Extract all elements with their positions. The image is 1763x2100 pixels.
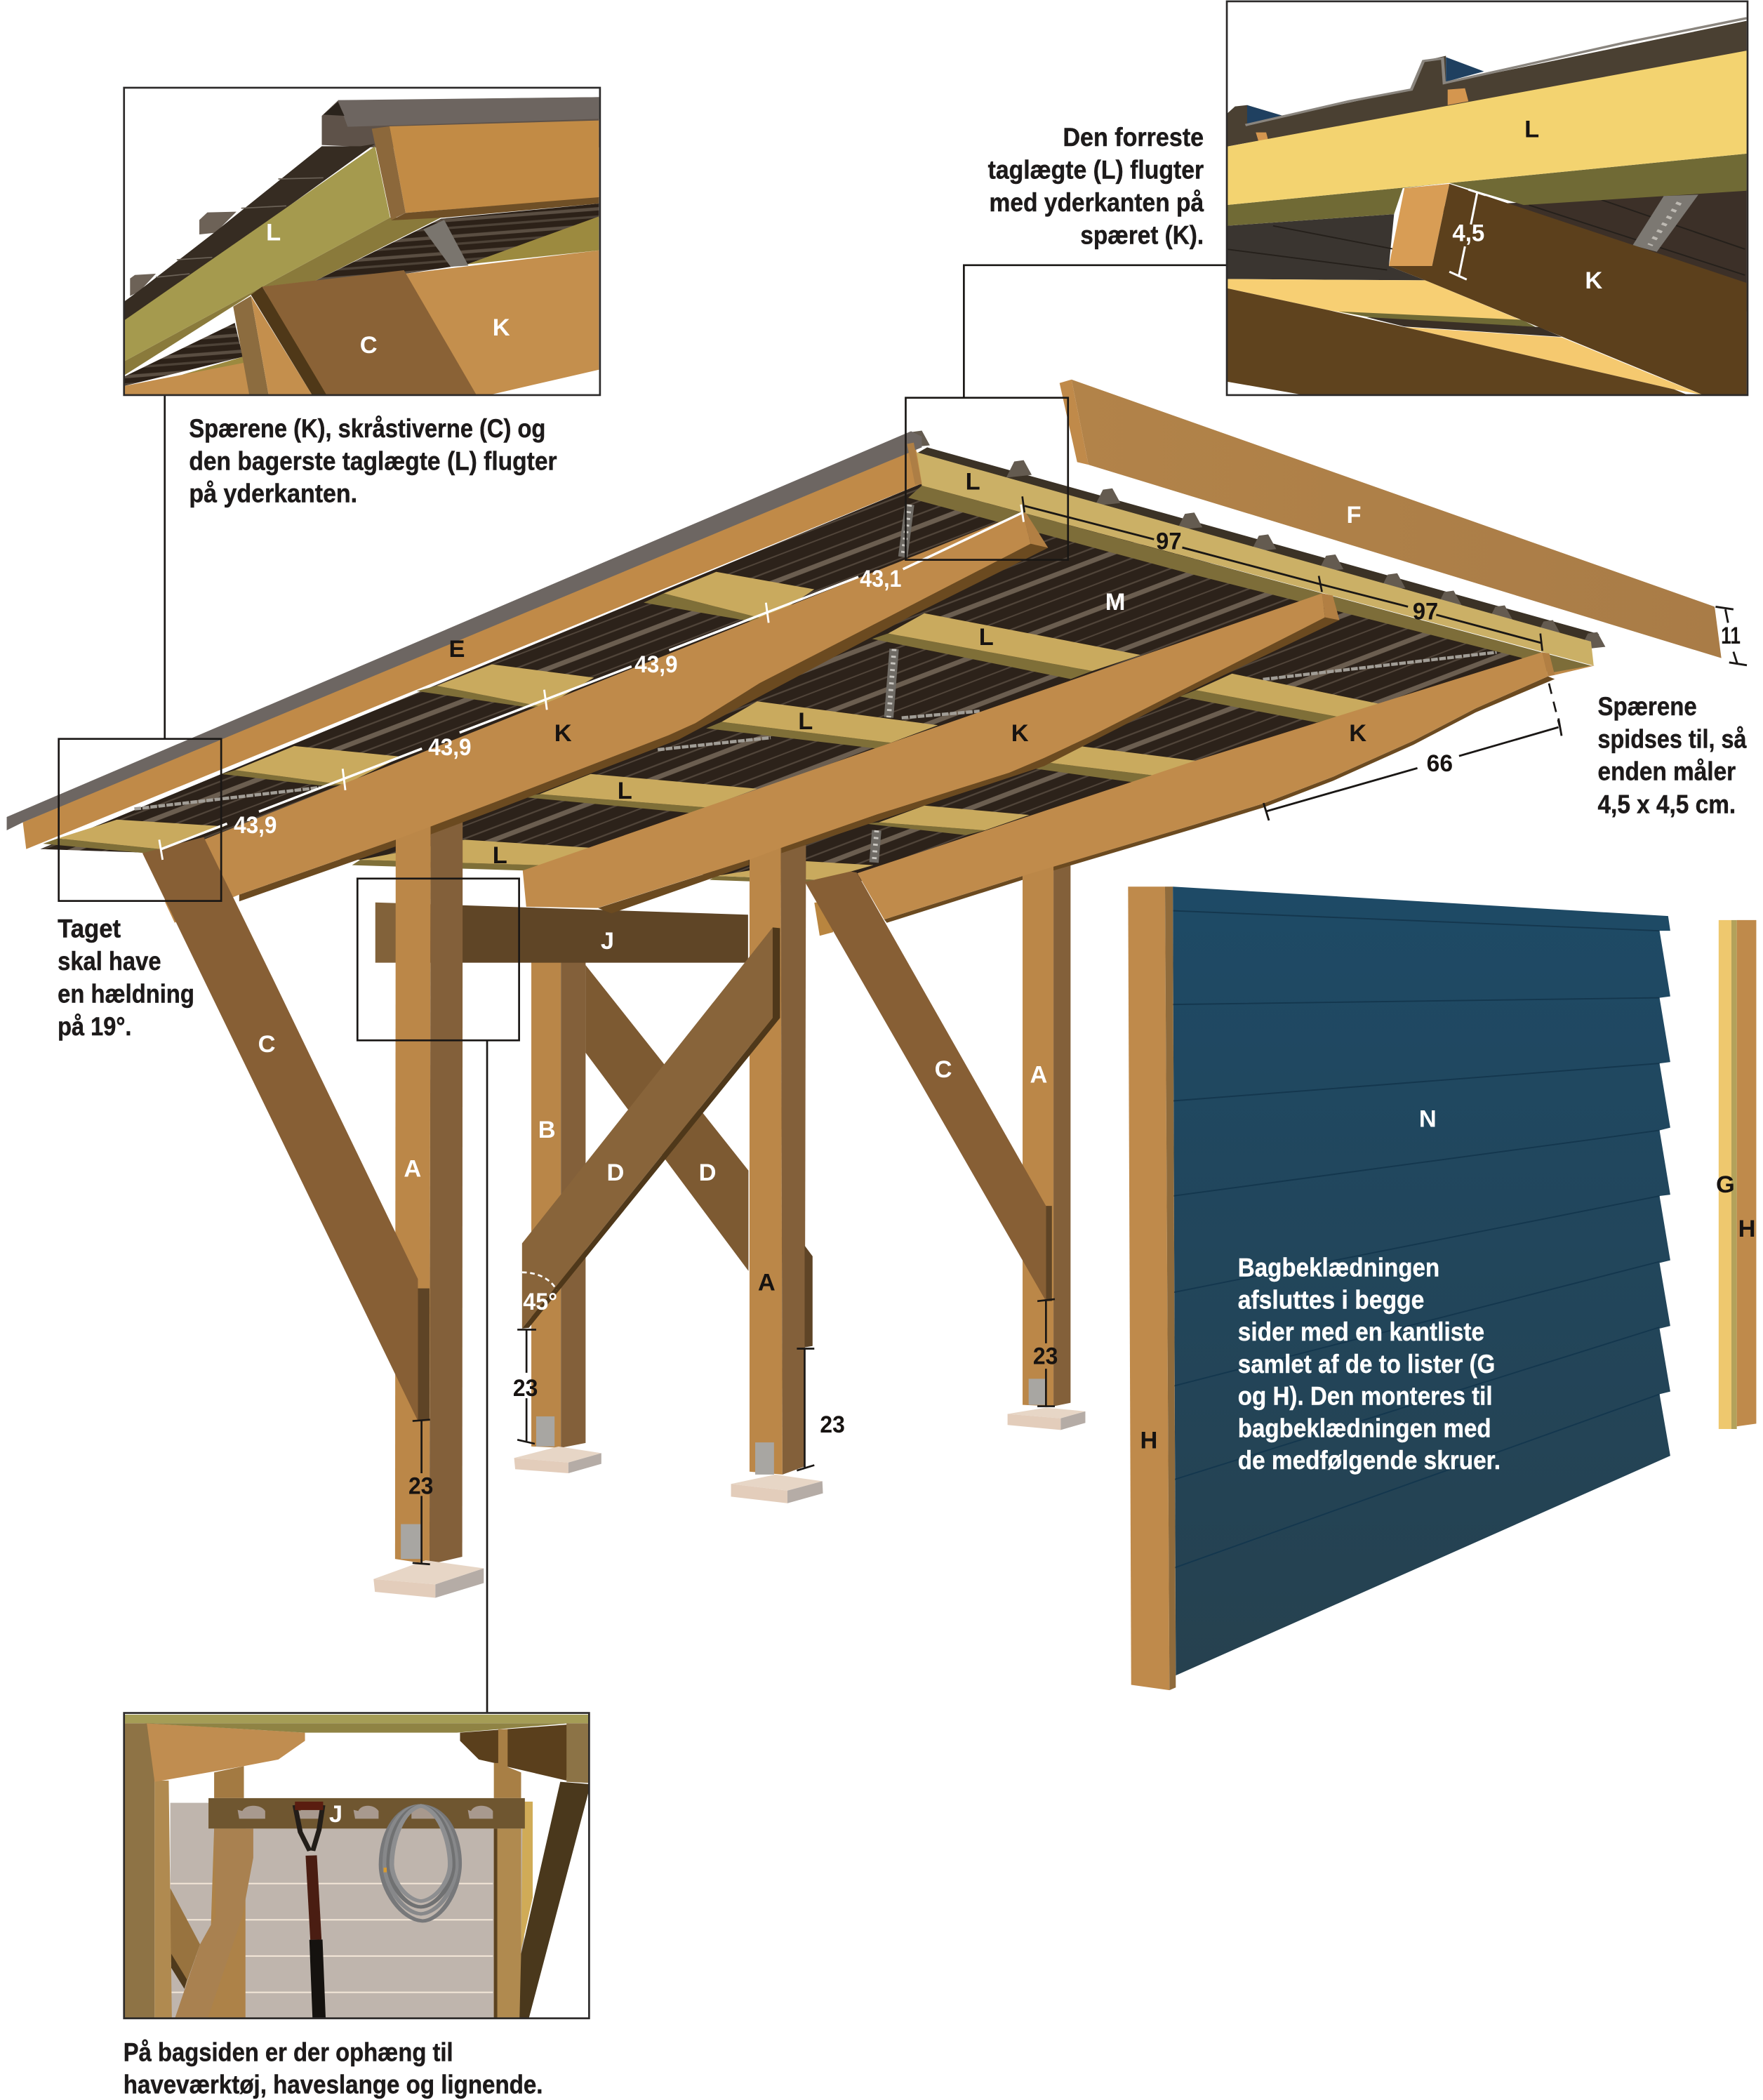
part letters on main drawing: C <box>935 1056 952 1083</box>
part letters on main drawing: N <box>1419 1106 1437 1133</box>
dimension: 97 and 97 rafter spacing <box>1023 496 1543 651</box>
dimension: 43,9 / 43,9 / 43,9 / 43,1 white spacing along rafter: 43,9 <box>234 812 277 839</box>
text: cladding note on panel: afsluttes i begge <box>1238 1284 1424 1314</box>
part letters on main drawing: K <box>554 720 572 747</box>
text: front batten caption: Den forreste <box>1063 122 1204 152</box>
text: rear rail caption: På bagsiden er der ophæng til <box>124 2038 453 2067</box>
part letters on main drawing: E <box>448 636 465 663</box>
text: rear rail caption <box>124 2038 543 2099</box>
inset: rear roof corner detail: K <box>493 314 510 341</box>
part letters on main drawing: K <box>1011 720 1029 747</box>
text: roof pitch note: på 19°. <box>58 1011 131 1041</box>
inset: rear roof corner detail <box>124 88 600 395</box>
inset: rear hanging rail J with spade and hose <box>124 1713 589 2019</box>
beam J <box>375 903 748 963</box>
text: rear corner caption: den bagerste taglægte (L) flugter <box>189 446 557 475</box>
rafter K (left) <box>160 512 1048 923</box>
text: rafter taper note: 4,5 x 4,5 cm. <box>1597 789 1736 818</box>
dimension: 45 degree angle: 45° <box>523 1289 557 1315</box>
dimension: 45 degree angle <box>522 1272 557 1315</box>
part letters on main drawing: H <box>1140 1428 1157 1454</box>
part letters on main drawing: L <box>618 778 632 804</box>
text: front batten caption: taglægte (L) flugter <box>988 155 1204 185</box>
inset: rear roof corner detail: C <box>360 332 378 359</box>
callout frames and leader lines <box>59 265 1228 1713</box>
text: rear corner caption <box>189 413 557 508</box>
text: cladding note on panel: bagbeklædningen med <box>1238 1414 1491 1442</box>
post B <box>531 962 585 1448</box>
dimensions: 23 distances at post bases: 23 <box>820 1411 845 1438</box>
fascia board E with metal roof edge <box>7 431 922 849</box>
post A (front) <box>395 804 463 1564</box>
text: front batten caption: med yderkanten på <box>990 187 1204 217</box>
dimension: 43,9 / 43,9 / 43,9 / 43,1 white spacing along rafter: 43,9 <box>428 734 471 761</box>
part letters on main drawing: K <box>1349 720 1366 747</box>
inset: front batten and rafter tip detail: L <box>1524 117 1539 143</box>
dimension: 43,9 / 43,9 / 43,9 / 43,1 white spacing along rafter: 43,9 <box>634 651 678 678</box>
part letters on main drawing: A <box>404 1155 421 1182</box>
part letters on main drawing: L <box>493 842 507 869</box>
part letters on main drawing: A <box>758 1270 776 1296</box>
text: cladding note on panel: sider med en kantliste <box>1238 1317 1484 1346</box>
part letters on main drawing: F <box>1346 502 1362 529</box>
dimension: 43,9 / 43,9 / 43,9 / 43,1 white spacing along rafter <box>159 505 1024 860</box>
text: cladding note on panel: samlet af de to lister (G <box>1238 1349 1495 1378</box>
text: rear rail caption: haveværktøj, haveslange og lignende. <box>124 2070 543 2099</box>
panel: loose fascia board F <box>1060 380 1722 658</box>
part letters on main drawing: G <box>1716 1171 1735 1198</box>
dimension: 97 and 97 rafter spacing: 97 <box>1156 528 1182 554</box>
inset: front batten and rafter tip detail: 4,5 <box>1452 220 1484 246</box>
text: rear corner caption: Spærene (K), skråstiverne (C) og <box>189 413 545 443</box>
part letters on main drawing: L <box>798 708 813 735</box>
text: cladding note on panel: og H). Den monteres til <box>1238 1381 1493 1411</box>
dimensions: 23 distances at post bases: 23 <box>513 1375 538 1402</box>
text: cladding note on panel <box>1238 1253 1501 1475</box>
post A (middle) <box>750 824 813 1475</box>
text: roof pitch note: en hældning <box>58 979 194 1009</box>
part letters on main drawing: L <box>979 624 994 651</box>
text: cladding note on panel: Bagbeklædningen <box>1238 1253 1439 1282</box>
text: front batten caption <box>988 122 1204 249</box>
dimension: 97 and 97 rafter spacing: 97 <box>1413 599 1438 625</box>
part letters on main drawing: A <box>1030 1062 1047 1089</box>
text: rear corner caption: på yderkanten. <box>189 479 357 508</box>
dimensions: 23 distances at post bases: 23 <box>1033 1343 1058 1369</box>
brace C (left) <box>142 837 430 1421</box>
dimension: 43,9 / 43,9 / 43,9 / 43,1 white spacing along rafter: 43,1 <box>860 566 902 592</box>
inset: front batten and rafter tip detail: K <box>1585 267 1602 294</box>
roof front: corrugated edge and front batten L <box>905 430 1605 675</box>
part letters on main drawing: J <box>601 928 614 955</box>
dimensions: 23 distances at post bases <box>408 1299 1058 1564</box>
text: rafter taper note <box>1597 691 1747 818</box>
inset: rear hanging rail J with spade and hose: J <box>329 1801 342 1828</box>
part letters on main drawing: C <box>258 1031 275 1058</box>
footings and metal brackets <box>373 1378 1085 1597</box>
rafter K (middle) <box>523 593 1340 913</box>
part letters on main drawing <box>258 468 1755 1454</box>
text: rafter taper note: Spærene <box>1597 691 1697 721</box>
part letters on main drawing: M <box>1105 589 1125 616</box>
part letters on main drawing: D <box>699 1159 716 1186</box>
rafter K (right) <box>814 652 1555 936</box>
brace C (right) <box>805 872 1052 1301</box>
dimension: 11 board height: 11 <box>1721 623 1741 649</box>
dimension: 11 board height <box>1715 606 1747 665</box>
dimension: 66 taper length: 66 <box>1427 750 1453 777</box>
dimension: 66 taper length <box>1263 684 1562 820</box>
part letters on main drawing: D <box>606 1159 624 1186</box>
text: roof pitch note: skal have <box>58 946 161 976</box>
dimensions: 23 distances at post bases: 23 <box>408 1473 433 1500</box>
inset: front batten and rafter tip detail <box>1226 1 1748 395</box>
text: rafter taper note: enden måler <box>1597 757 1736 786</box>
brace D (front) <box>522 927 780 1329</box>
text: roof pitch note <box>58 914 194 1041</box>
part letters on main drawing: H <box>1738 1216 1755 1242</box>
brace D (back) <box>585 965 748 1271</box>
post A (right) <box>1023 851 1070 1407</box>
text: roof pitch note: Taget <box>58 914 121 943</box>
text: front batten caption: spæret (K). <box>1080 220 1204 249</box>
part letters on main drawing: B <box>538 1117 556 1143</box>
part letters on main drawing: L <box>966 468 980 495</box>
inset: rear roof corner detail: L <box>266 220 281 246</box>
roof battens L <box>43 572 1378 884</box>
roof sheets underside <box>40 484 1572 882</box>
text: cladding note on panel: de medfølgende skruer. <box>1238 1445 1501 1475</box>
panel: edge strips G and H <box>1719 920 1756 1429</box>
panel: back wall cladding N with edge strip H <box>1128 886 1670 1690</box>
